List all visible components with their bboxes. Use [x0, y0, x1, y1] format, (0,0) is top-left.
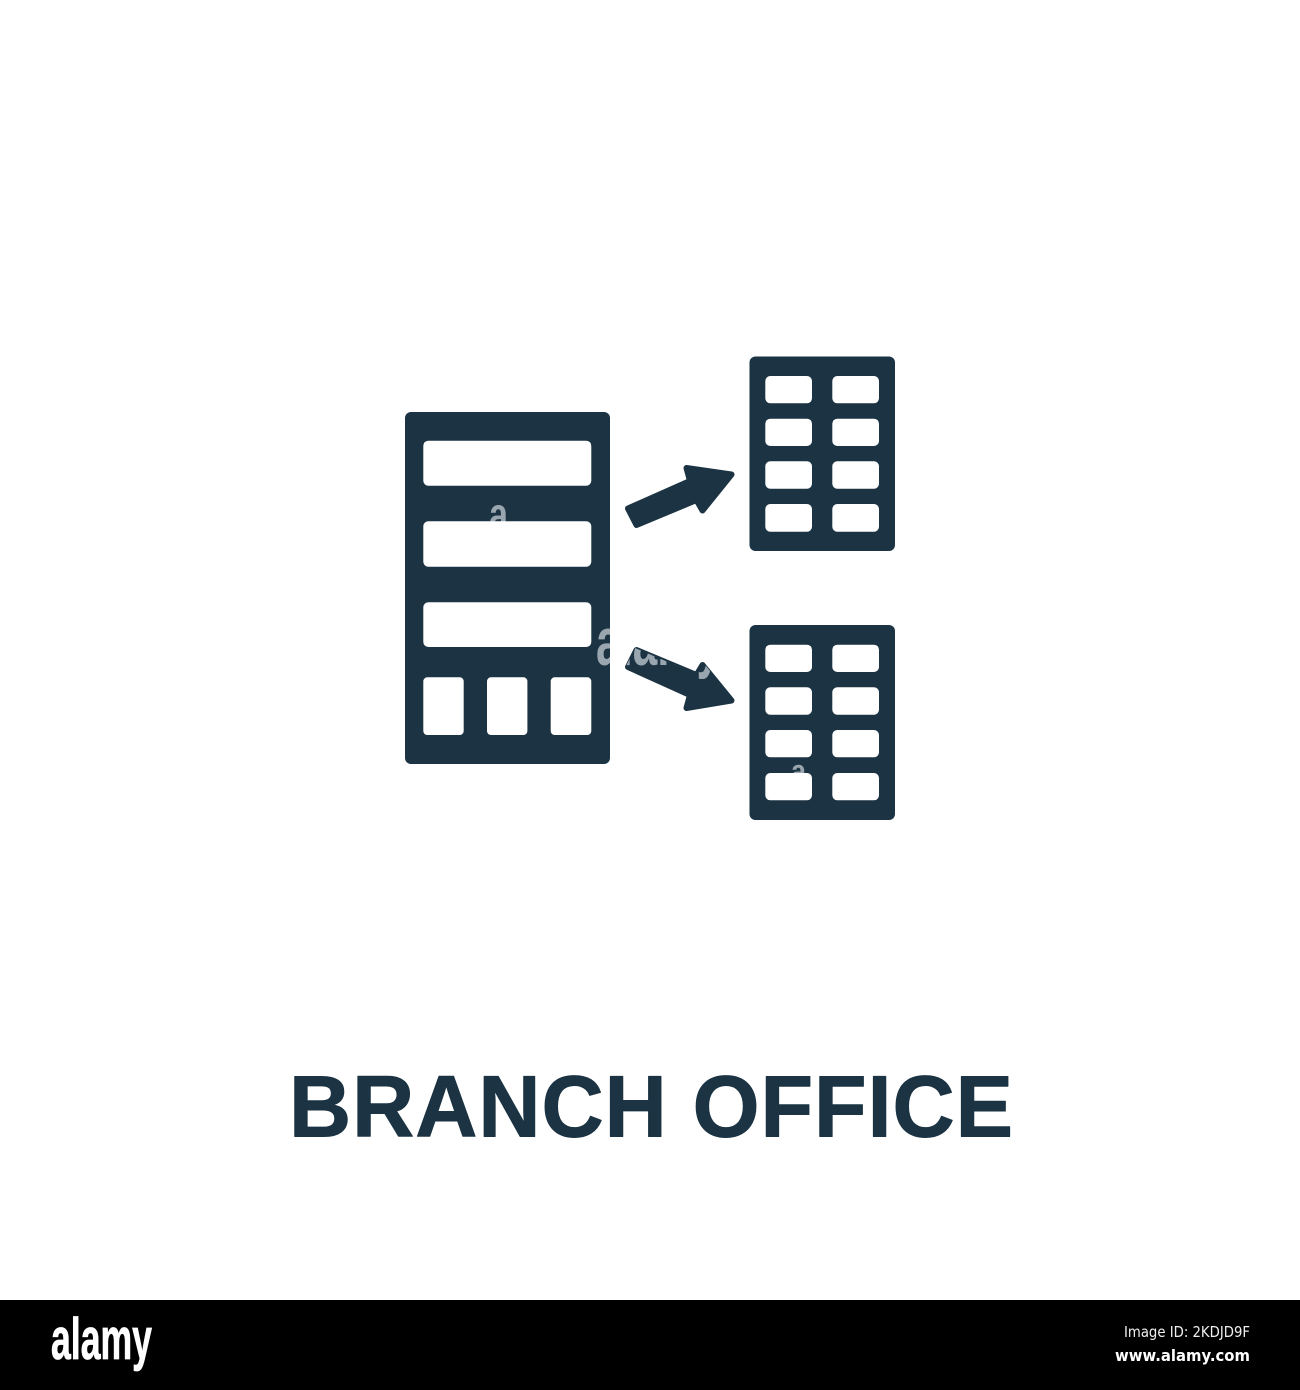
image id: Image ID: 2KDJD9F	[1124, 1323, 1250, 1341]
footer bar	[0, 1300, 1300, 1390]
arrow: to lower branch	[628, 650, 732, 708]
title: BRANCH OFFICE	[289, 1058, 1014, 1156]
main office windows	[423, 441, 591, 735]
logo: alamy: alamy	[51, 1307, 152, 1372]
website: www.alamy.com	[1115, 1346, 1250, 1365]
watermark: alamy fragments on dark shapes: alamy	[596, 604, 721, 680]
lower branch windows	[765, 645, 879, 800]
watermark: alamy fragments on dark shapes: a	[489, 489, 508, 542]
icon: upper branch building	[750, 356, 895, 551]
upper branch windows	[765, 376, 879, 532]
icon: branch office network	[405, 356, 895, 820]
icon: lower branch building	[750, 625, 895, 820]
arrow: to upper branch	[628, 468, 732, 525]
icon: main office building	[405, 412, 610, 764]
watermark: alamy fragments on dark shapes	[490, 505, 804, 773]
watermark: alamy fragments on dark shapes: a	[791, 753, 806, 789]
